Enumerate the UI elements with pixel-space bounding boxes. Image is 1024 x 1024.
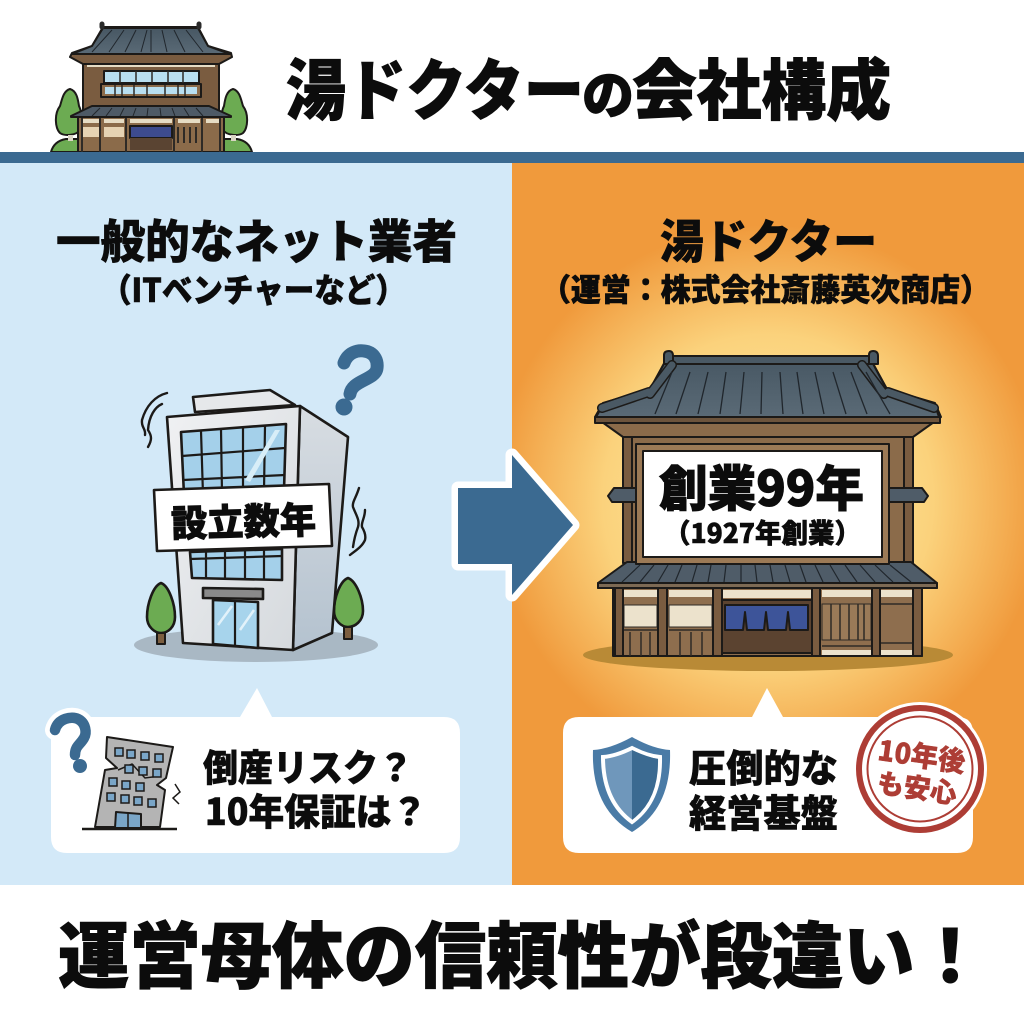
panel: Yu Doctor [512, 163, 1024, 885]
title [286, 38, 891, 134]
callout: strength [563, 688, 987, 853]
stamp text: peace of mind: も安心 [875, 761, 960, 811]
callout: risk [51, 688, 460, 853]
icon: question mark on callout [55, 718, 87, 773]
sign text: founded 1927: （1927年創業） [664, 512, 861, 551]
callout text: risk: 倒産リスク？ [203, 738, 413, 792]
bottom conclusion: 運営母体の信頼性が段違い！ [58, 898, 986, 1003]
callout text: business base: 経営基盤 [689, 783, 838, 838]
icon: collapsing building [82, 737, 180, 829]
sign text: 99 years since founding: 創業99年 [659, 450, 864, 521]
arrow [458, 455, 573, 595]
glow behind Japanese building [512, 225, 1024, 755]
illustration: modern office building [134, 351, 378, 662]
title: の [582, 54, 634, 129]
icon: question mark [336, 351, 377, 415]
icon: shield [593, 737, 670, 832]
heading: general internet vendors: 一般的なネット業者 [56, 206, 457, 272]
banner: founded a few years ago: 設立数年 [170, 490, 317, 548]
illustration: traditional Japanese building [583, 351, 953, 671]
stamp [853, 702, 987, 836]
subheading: IT venture: （ITベンチャーなど） [101, 264, 406, 312]
header band [0, 152, 1024, 163]
callout text: overwhelming: 圧倒的な [689, 738, 838, 793]
callout text: warranty question: 10年保証は？ [205, 782, 427, 836]
title: 会社構成 [632, 38, 891, 134]
title: 湯ドクター [286, 38, 584, 134]
panel: general internet vendors [0, 163, 512, 885]
icon: header Japanese building [51, 24, 252, 152]
subheading: operating company: （運営：株式会社斎藤英次商店） [541, 265, 990, 310]
heading: Yu Doctor: 湯ドクター [660, 206, 877, 272]
sign frame [636, 444, 889, 564]
stamp text: after 10 years: 10年後 [875, 729, 968, 781]
